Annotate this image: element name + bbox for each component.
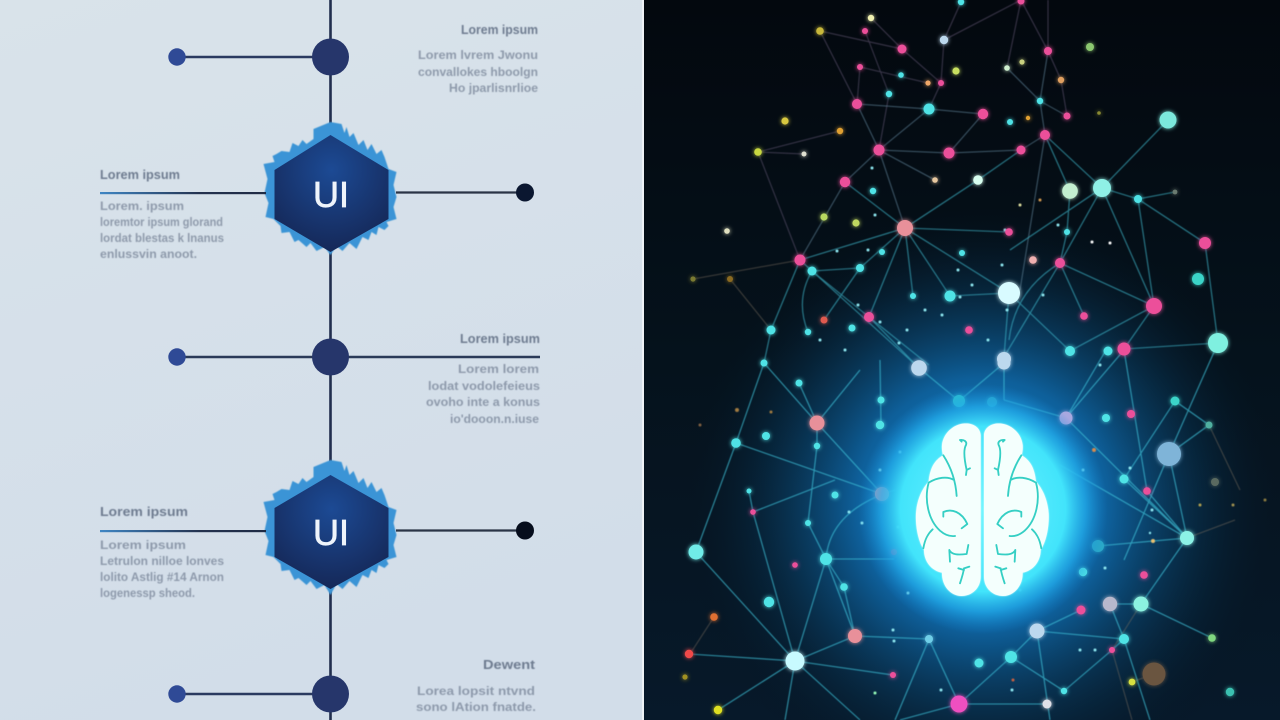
hexagon node 1: UI (313, 174, 349, 215)
text block 1: Lorem lvrem Jwonu (418, 50, 538, 62)
hexagon node 1 (264, 122, 396, 255)
text block 4: logenessp sheod. (100, 588, 195, 600)
text block 2: enlussvin anoot. (100, 249, 197, 261)
text block 3 (426, 331, 540, 426)
text block 1: convallokes hboolgn (418, 67, 538, 79)
text block 5: sono lAtion fnatde. (416, 702, 536, 714)
connector 2 right (396, 522, 534, 540)
text block 2: Lorem ipsum (100, 167, 180, 182)
panel edge highlight (642, 0, 644, 720)
text block 4: Lorem ipsum (100, 504, 188, 519)
hexagon node 2 (264, 460, 396, 595)
text block 2: lordat blestas k lnanus (100, 233, 224, 245)
icon: brain (916, 424, 1049, 596)
text block 3: Lorem lorem (458, 364, 539, 376)
panel: timeline (0, 0, 643, 720)
network nodes (682, 0, 1234, 714)
text block 5 (416, 657, 536, 714)
brain glow (858, 374, 1108, 644)
text block 1: Lorem ipsum (461, 22, 538, 37)
text block 1: Ho jparlisnrlioe (449, 83, 538, 95)
network edges (689, 0, 1240, 720)
text block 4: Letrulon nilloe lonves (100, 556, 224, 568)
text block 2: loremtor ipsum glorand (100, 217, 223, 229)
text block 2 (100, 167, 224, 261)
text block 3: io'dooon.n.iuse (450, 414, 539, 426)
text block 1 (418, 22, 538, 95)
panel: neural network (643, 0, 1280, 720)
brain folds (923, 440, 1041, 583)
node row 3 (168, 676, 349, 712)
text block 3: ovoho inte a konus (426, 397, 540, 409)
connector 1 right (396, 184, 534, 202)
node row 1 (168, 38, 349, 76)
hexagon node 2: UI (313, 512, 349, 553)
small particles (698, 166, 1266, 694)
text block 5: Dewent (483, 657, 536, 672)
connector 2 left (100, 530, 266, 532)
text block 4 (100, 504, 224, 600)
text block 4: Lorem ipsum (100, 540, 186, 552)
text block 4: lolito Astlig #14 Arnon (100, 572, 224, 584)
timeline spine (329, 0, 332, 720)
text block 3: lodat vodolefeieus (428, 381, 540, 393)
text block 2: Lorem. ipsum (100, 201, 184, 213)
text block 3: Lorem ipsum (460, 331, 540, 346)
text block 5: Lorea lopsit ntvnd (417, 686, 535, 698)
connector 1 left (100, 192, 266, 194)
node row 2 (168, 338, 540, 376)
